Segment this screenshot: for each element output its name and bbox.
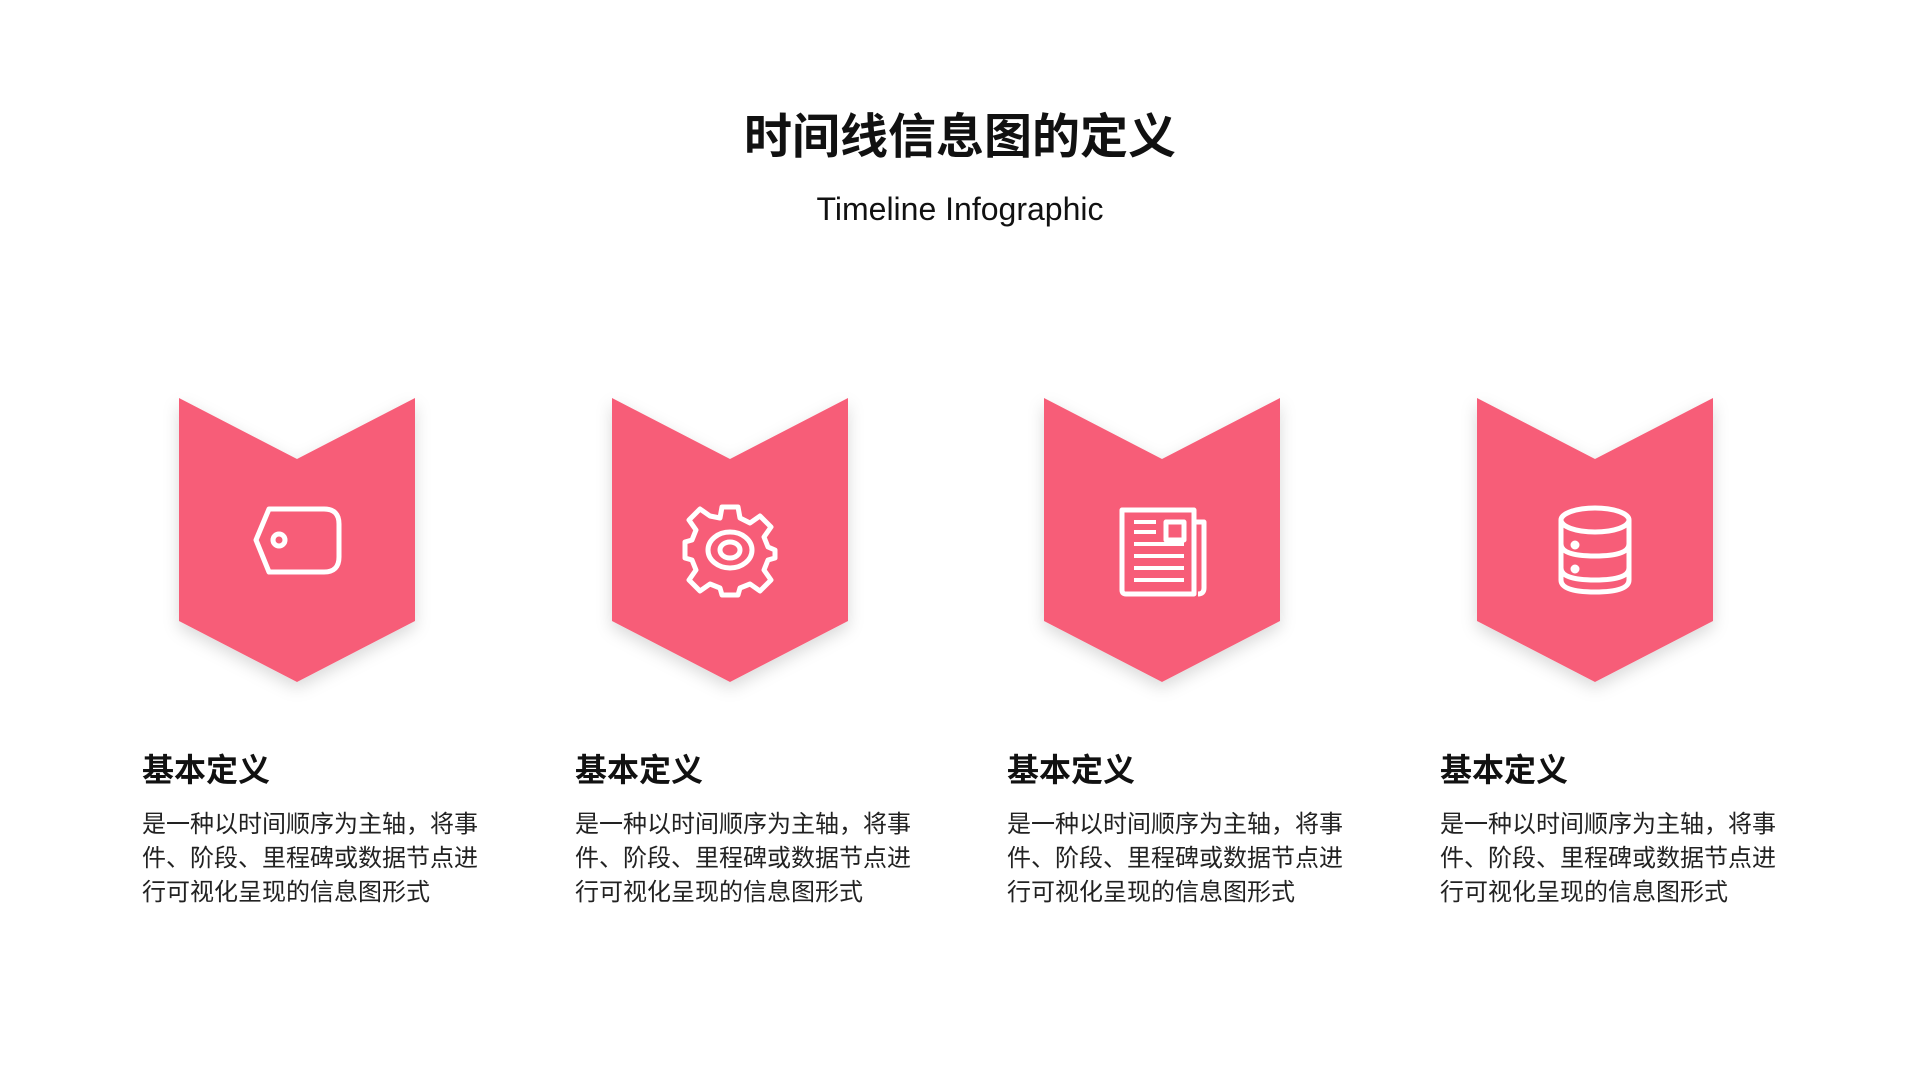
text block 2: 是一种以时间顺序为主轴，将事件、阶段、里程碑或数据节点进行可视化呈现的信息图形式 [575,811,911,906]
title: 时间线信息图的定义 [744,111,1176,164]
text block 1: 基本定义 [142,752,270,788]
panel: shape 1 tag [173,398,421,691]
panel: shape 4 database [1471,398,1719,691]
text block 2 [575,752,911,906]
icon: gear [685,507,775,595]
icon: tag [256,509,339,572]
icon: newspaper [1122,510,1204,594]
text block 4: 是一种以时间顺序为主轴，将事件、阶段、里程碑或数据节点进行可视化呈现的信息图形式 [1440,811,1776,906]
text block 1 [142,752,478,906]
text block 4 [1440,752,1776,906]
text block 4: 基本定义 [1440,752,1568,788]
text block 3: 是一种以时间顺序为主轴，将事件、阶段、里程碑或数据节点进行可视化呈现的信息图形式 [1007,811,1343,906]
icon: database [1561,508,1629,592]
panel: shape 2 gear [606,398,854,691]
text block 2: 基本定义 [575,752,703,788]
panel: shape 3 newspaper [1038,398,1286,691]
subtitle: Timeline Infographic [817,191,1103,227]
text block 3: 基本定义 [1007,752,1135,788]
text block 3 [1007,752,1343,906]
text block 1: 是一种以时间顺序为主轴，将事件、阶段、里程碑或数据节点进行可视化呈现的信息图形式 [142,811,478,906]
